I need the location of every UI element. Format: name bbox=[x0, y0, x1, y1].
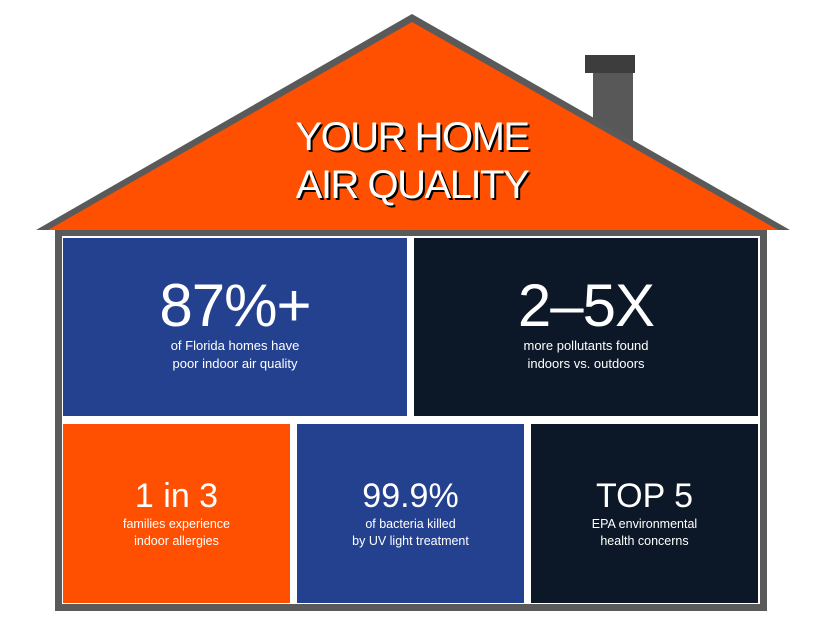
panel: 1 in 3 bbox=[63, 424, 290, 603]
title bbox=[295, 114, 531, 208]
panel: 87%: poor indoor air quality bbox=[172, 356, 298, 371]
panel: 99.9% bbox=[297, 424, 524, 603]
panel: 2-5X: more pollutants found bbox=[523, 338, 649, 353]
panel: 1 in 3: families experience bbox=[123, 517, 230, 531]
panel: 2-5X: indoors vs. outdoors bbox=[527, 356, 645, 371]
panel: top 5: TOP 5 bbox=[596, 477, 693, 515]
title: AIR QUALITY bbox=[296, 162, 528, 206]
panel: 99.9%: 99.9% bbox=[362, 477, 459, 515]
panel: top 5: EPA environmental bbox=[592, 517, 697, 531]
roof bbox=[36, 14, 790, 230]
title: YOUR HOME bbox=[295, 114, 529, 158]
panel: top 5: health concerns bbox=[600, 534, 689, 548]
panel: 99.9%: of bacteria killed bbox=[365, 517, 456, 531]
chimney bbox=[585, 55, 635, 150]
panel: 87%: 87%+ bbox=[159, 272, 311, 339]
panel: 2-5X bbox=[414, 238, 758, 416]
panel: 2-5X: 2–5X bbox=[518, 272, 654, 339]
panel: 1 in 3: 1 in 3 bbox=[135, 477, 218, 515]
panel: 87%: of Florida homes have bbox=[171, 338, 299, 353]
house body bbox=[55, 230, 767, 611]
panel: 1 in 3: indoor allergies bbox=[134, 534, 219, 548]
panel: 87% bbox=[63, 238, 407, 416]
panel: 99.9%: by UV light treatment bbox=[352, 534, 469, 548]
panel: top 5 bbox=[531, 424, 758, 603]
